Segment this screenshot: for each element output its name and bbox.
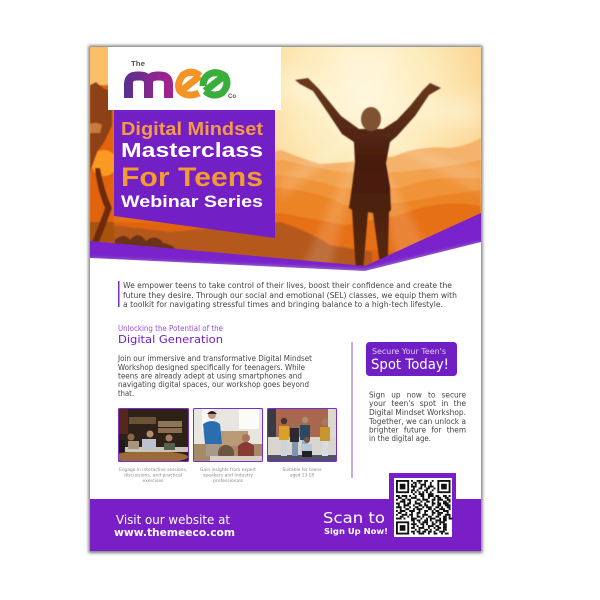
flyer page: [86, 43, 485, 556]
footer band: [90, 499, 481, 551]
caption 1: Engage in interactive sessions,: [119, 467, 188, 473]
workshop paragraph: teens are already adept at using smartphones and: [118, 372, 302, 380]
intro text: a toolkit for navigating stressful times and bringing balance to a high-tech lifestyle.: [123, 299, 443, 309]
sign-up text: Together, we can unlock a: [368, 417, 466, 426]
caption 1: [119, 467, 188, 484]
sign-up text: brighter future for them: [369, 426, 466, 434]
tree: [90, 47, 117, 242]
workshop paragraph: Workshop designed specifically for teenagers. While: [118, 363, 305, 372]
caption 3: aged 13-18: [290, 472, 314, 478]
logo text: Co: Co: [228, 94, 236, 100]
sign-up text: Sign up now to secure: [369, 390, 466, 400]
logo panel: [108, 47, 281, 110]
photo: mentor with teens: [193, 408, 263, 462]
poster shadow: [88, 46, 482, 553]
footer website label: Visit our website at: [116, 513, 230, 527]
caption 2: professionals: [213, 478, 244, 484]
call-to-action button: [366, 342, 457, 376]
QR code: [389, 473, 456, 537]
caption 1: discussions, and practical: [124, 472, 182, 478]
silhouette: [295, 78, 441, 272]
white content area: [90, 242, 481, 499]
sign-up text: in the digital age.: [369, 434, 431, 443]
sign-up text: your teen's spot in the: [369, 399, 466, 408]
caption 3: Suitable for teens: [282, 467, 322, 473]
footer website url: www.themeeco.com: [114, 526, 235, 539]
sky: [90, 47, 481, 241]
sign-up text: [368, 390, 466, 443]
vertical divider: [352, 342, 353, 478]
caption 2: [200, 467, 256, 484]
title line: Digital Mindset: Digital Mindset: [121, 119, 263, 139]
photo: group of teens: [267, 408, 337, 462]
title line: For Teens: For Teens: [121, 162, 263, 192]
sun rays: [281, 70, 481, 132]
intro text: future they desire. Through our social and emotional (SEL) classes, we equip them with: [123, 290, 457, 300]
intro text: [123, 280, 457, 309]
heading main: Digital Generation: [118, 333, 223, 346]
purple swoosh band: [90, 213, 481, 271]
title line: Masterclass: Masterclass: [121, 140, 263, 162]
logo letter m: [128, 76, 168, 98]
workshop paragraph: that.: [118, 389, 134, 398]
workshop paragraph: Join our immersive and transformative Digital Mindset: [117, 354, 312, 363]
hero photo: sunset with raised-arms silhouette: [90, 47, 481, 272]
caption 3: [282, 467, 322, 478]
caption 2: speakers and industry: [203, 472, 253, 478]
footer sign-up label: Sign Up Now!: [324, 527, 388, 536]
heading kicker: Unlocking the Potential of the: [118, 324, 223, 333]
logo letter e green: [203, 73, 227, 95]
workshop paragraph: navigating digital spaces, our workshop goes beyond: [118, 380, 309, 389]
poster sheet: [90, 47, 481, 551]
footer scan label: Scan to: [323, 509, 385, 527]
caption 2: Gain insights from expert: [200, 467, 256, 473]
logo text: The: The: [131, 61, 145, 68]
intro accent bar: [118, 281, 120, 307]
logo letter e orange: [179, 72, 200, 95]
title panel: [114, 110, 275, 238]
section heading: [118, 324, 223, 346]
caption 1: exercises: [142, 478, 164, 484]
intro text: We empower teens to take control of their lives, boost their confidence and create the: [123, 280, 452, 290]
button small line: Secure Your Teen's: [372, 347, 446, 356]
light beams over the mountains: [279, 149, 481, 263]
mountain layers: [90, 138, 481, 272]
title line: Webinar Series: Webinar Series: [121, 192, 263, 211]
button big line: Spot Today!: [371, 357, 449, 373]
sign-up text: Digital Mindset Workshop.: [369, 408, 466, 417]
workshop paragraph: [117, 354, 312, 398]
foreground foliage: [115, 235, 176, 250]
photo: group session: [112, 408, 189, 463]
swoosh shadow: [90, 244, 481, 272]
